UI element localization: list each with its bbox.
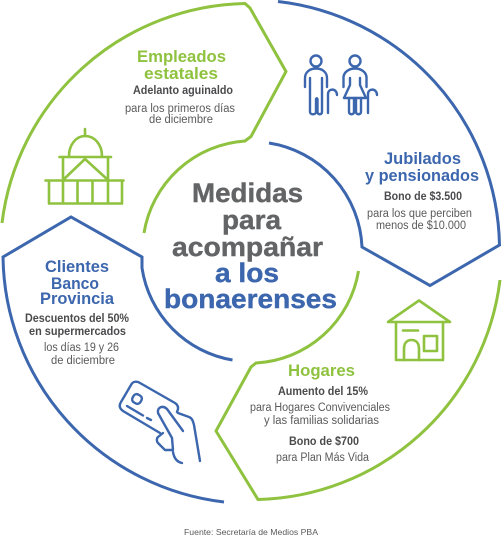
panel: Clientes Banco Provincia [3,217,232,502]
text: Adelanto aguinaldo: Adelanto aguinaldo [133,85,233,97]
source note: Fuente: Secretaría de Medios PBA [184,527,318,537]
text: para los que perciben menos de $10.000 [367,208,472,232]
text: para Hogares Convivenciales y las familias solidarias [250,402,390,427]
text: para los primeros días de diciembre: para los primeros días [125,103,235,115]
panel: Jubilados y pensionados [269,2,500,286]
text: los días 19 y 26 de diciembre: de diciembre [51,355,115,367]
text: para Hogares Convivenciales y las familias solidarias: para Hogares Convivenciales [250,402,390,414]
text: para los primeros días de diciembre [125,103,235,126]
text: los días 19 y 26 de diciembre: los días 19 y 26 [44,342,119,354]
text: los días 19 y 26 de diciembre [44,342,119,367]
icon: elderly couple with canes [305,56,377,114]
icon: government building [46,129,124,204]
title grey lines [172,178,324,262]
green segment outline [216,271,500,500]
heading: Empleados estatales: Empleados [137,47,226,66]
icon: hand holding credit card [120,382,200,463]
heading: Clientes Banco Provincia: Provincia [40,289,115,308]
heading: Clientes Banco Provincia [40,257,115,308]
icon: house [388,300,450,360]
title blue lines [164,258,337,314]
blue segment outline [269,2,500,286]
green arrow segment outline [2,4,286,233]
heading: Empleados estatales [137,47,226,83]
blue segment outline [3,217,232,502]
heading: Clientes Banco Provincia: Banco [51,274,99,293]
heading: Jubilados y pensionados: Jubilados [384,149,461,168]
text: para Plan Más Vida: para Plan Más Vida [276,452,370,464]
text: Descuentos del 50% en supermercados: en supermercados [29,326,126,338]
title grey lines: acompañar [172,232,324,262]
heading: Hogares: Hogares [288,361,355,380]
heading: Clientes Banco Provincia: Clientes [45,257,109,276]
text: para los que perciben menos de $10.000: para los que perciben [367,208,472,220]
title grey lines: para [222,205,282,235]
heading: Jubilados y pensionados [365,149,479,185]
text: Bono de $3.500: Bono de $3.500 [384,191,462,203]
text: para Hogares Convivenciales y las familias solidarias: y las familias solidarias [264,415,379,427]
panel: Hogares [216,271,500,500]
panel: Empleados estatales [2,4,286,233]
text: Bono de $700: Bono de $700 [289,436,359,448]
heading: Empleados estatales: estatales [144,64,218,83]
text: para los primeros días de diciembre: de diciembre [149,114,213,126]
text: Descuentos del 50% en supermercados: Descuentos del 50% [25,313,129,325]
heading: Jubilados y pensionados: y pensionados [365,166,479,185]
text: Descuentos del 50% en supermercados [25,313,129,338]
text: para los que perciben menos de $10.000: menos de $10.000 [376,220,466,232]
title grey lines: Medidas [192,178,303,208]
title blue lines: bonaerenses [164,284,337,314]
title blue lines: a los [215,258,279,288]
text: Aumento del 15%: Aumento del 15% [278,386,368,398]
center title: Medidas para acompañar a los bonaerenses [164,178,337,314]
